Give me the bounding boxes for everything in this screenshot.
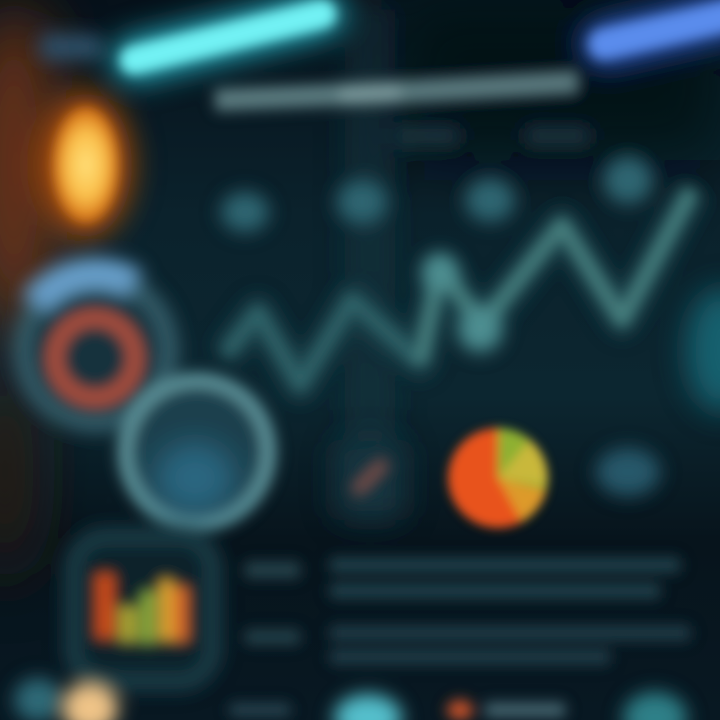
cyan top bar: [134, 14, 322, 60]
small red mark panel: [335, 440, 405, 520]
bottom orange icon: [447, 700, 473, 720]
right stat blob: [596, 448, 660, 496]
vertical center glow: [345, 0, 395, 480]
line chart: [225, 190, 692, 385]
blue top bar: [604, 14, 720, 44]
subtitle labels: [395, 128, 590, 144]
bar chart panel: [72, 535, 214, 683]
text block one: [330, 558, 680, 598]
bottom left teal icon: [14, 678, 62, 720]
top left small label: [40, 34, 102, 60]
right edge teal blob: [686, 288, 720, 412]
bottom grey label: [485, 703, 565, 717]
bottom teal icon: [623, 692, 687, 720]
title: [215, 82, 578, 100]
bottom cyan icon: [334, 694, 402, 720]
donut chart circle: [22, 274, 170, 424]
bottom peach icon: [62, 682, 118, 720]
bottom footer label: [230, 704, 290, 716]
left brown glow: [0, 5, 60, 580]
text row labels: [245, 562, 300, 644]
bars: [94, 572, 190, 644]
pie chart: [448, 428, 548, 528]
dark right panel shading: [400, 0, 720, 160]
chart lower nodes: [422, 254, 502, 352]
text block two: [330, 626, 690, 664]
chart data point markers: [221, 156, 653, 232]
orange pill icon: [40, 93, 132, 237]
hexagon circle icon: [125, 380, 269, 524]
